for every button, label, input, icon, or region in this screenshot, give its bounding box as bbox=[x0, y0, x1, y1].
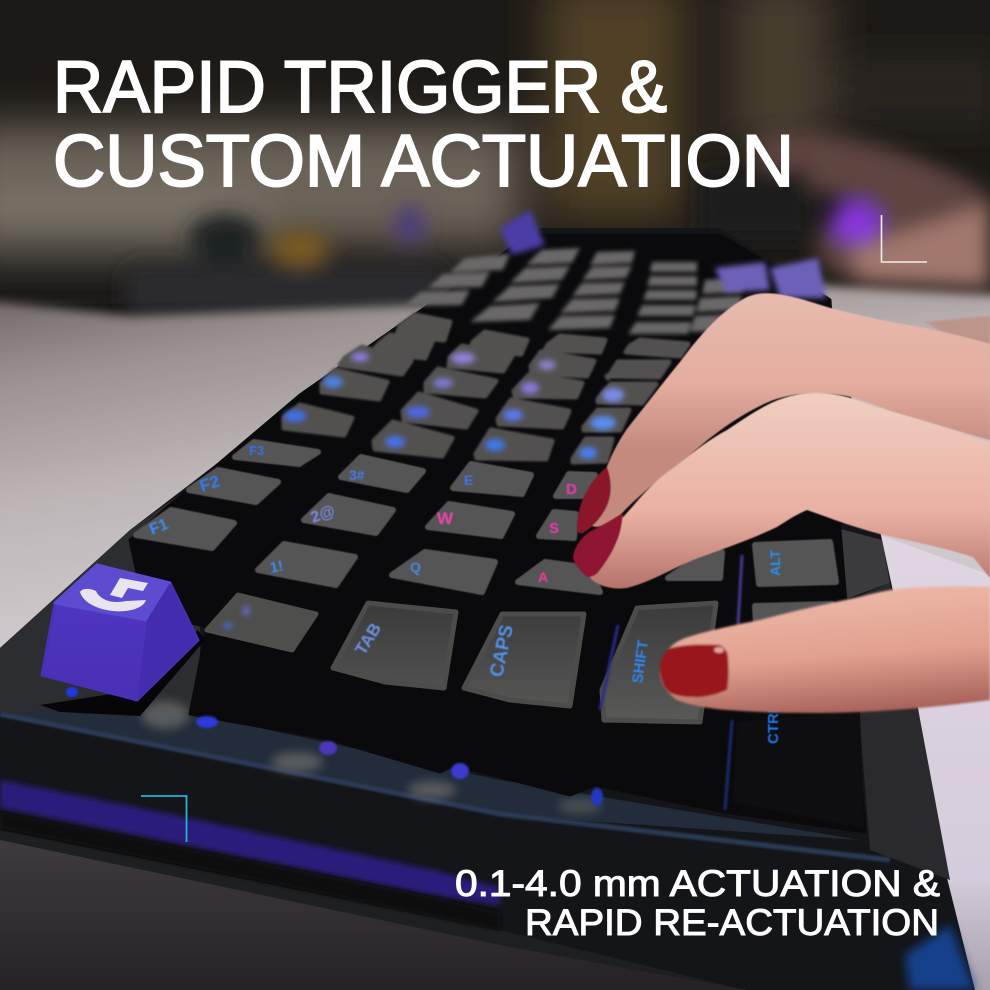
key legends: S bbox=[549, 520, 559, 537]
hand: upper finger bbox=[577, 293, 990, 533]
purple far keycaps bbox=[500, 210, 826, 298]
hand: lower finger bbox=[660, 586, 990, 713]
title: RAPID TRIGGER & bbox=[53, 47, 667, 128]
corner mark: blue bbox=[141, 796, 186, 842]
key legends bbox=[147, 443, 783, 744]
key legends: TAB bbox=[351, 620, 385, 658]
key legends: ALT bbox=[767, 549, 783, 576]
far keys, out of focus bbox=[405, 248, 745, 334]
key: ctrl bbox=[733, 712, 864, 828]
wrist edge bbox=[925, 316, 990, 350]
keyboard body bbox=[0, 228, 975, 990]
key legends: CTRL bbox=[765, 704, 782, 744]
key edge lights bbox=[600, 555, 742, 810]
key legends: 2@ bbox=[309, 502, 337, 527]
keys: mid-distance tops bbox=[284, 315, 688, 462]
key legends: CAPS bbox=[486, 623, 518, 679]
key legends: F2 bbox=[197, 472, 222, 496]
title: CUSTOM ACTUATION bbox=[53, 121, 794, 202]
desk surface bbox=[0, 280, 990, 990]
caption: RAPID RE-ACTUATION bbox=[525, 902, 939, 943]
key glows bbox=[224, 352, 624, 629]
key legends: SHIFT bbox=[629, 639, 652, 685]
key legends: 3# bbox=[349, 467, 365, 483]
caption: 0.1-4.0 mm ACTUATION & bbox=[455, 863, 940, 904]
keys: front row bbox=[207, 595, 716, 722]
key legends: W bbox=[437, 509, 454, 528]
icon: purple logo key bbox=[40, 565, 205, 716]
key legends: F1 bbox=[147, 516, 171, 539]
corner mark: white bbox=[882, 215, 927, 262]
hand: middle finger bbox=[573, 393, 990, 589]
key legends: Q bbox=[410, 559, 421, 575]
key legends: 1! bbox=[268, 558, 285, 577]
title bbox=[53, 47, 794, 202]
key legends: F3 bbox=[249, 443, 264, 458]
key legends: E bbox=[464, 472, 473, 488]
deck reflections bbox=[141, 701, 602, 814]
blurred far hand bbox=[700, 133, 990, 290]
key legends: D bbox=[566, 481, 577, 498]
key legends: A bbox=[538, 569, 548, 585]
caption bbox=[455, 863, 940, 943]
keys: black key bodies bbox=[130, 235, 865, 832]
